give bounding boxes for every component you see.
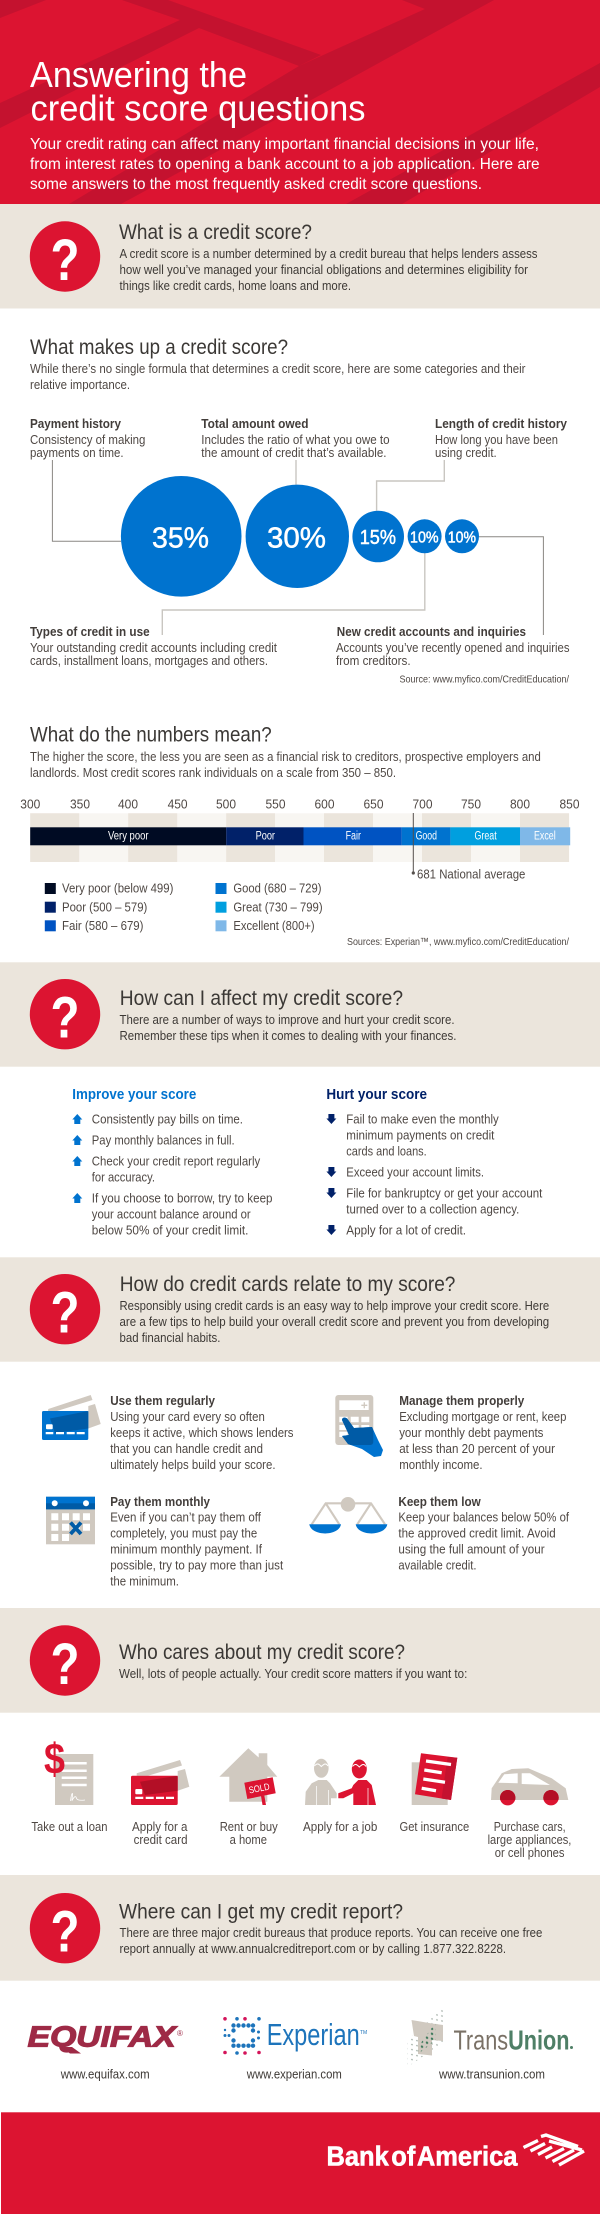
tip: use them regularly	[42, 1394, 294, 1472]
item: take out a loan	[31, 1735, 108, 1834]
body text	[120, 247, 538, 293]
panel: what makes up a credit score	[30, 336, 570, 686]
tip text	[110, 1394, 294, 1472]
heading: improve: Improve your score	[72, 1087, 196, 1103]
axis labels: 800	[510, 797, 530, 812]
icon: question mark: ?	[50, 1632, 80, 1697]
axis labels	[20, 797, 580, 812]
tip text: Use them regularly	[110, 1394, 215, 1408]
label: new credit accounts and inquiries: from creditors.	[336, 654, 411, 668]
heading: What makes up a credit score?	[30, 336, 288, 359]
tip text: available credit.	[398, 1559, 476, 1573]
hurt list: cards and loans.	[346, 1144, 427, 1158]
intro text: some answers to the most frequently asked credit score questions.	[30, 176, 482, 193]
label: a home	[230, 1833, 267, 1847]
panel: where can I get my credit report	[0, 1875, 600, 1981]
tip text: the approved credit limit. Avoid	[398, 1527, 556, 1541]
tip text: Manage them properly	[399, 1394, 524, 1408]
axis labels: 350	[70, 797, 90, 812]
body text: Remember these tips when it comes to dealing with your finances.	[120, 1029, 456, 1043]
body text: how well you’ve managed your financial obligations and determines eligibility for	[120, 263, 528, 277]
icon: car	[491, 1768, 568, 1805]
tip: keep them low	[309, 1495, 569, 1573]
axis labels: 450	[168, 797, 188, 812]
label: Get insurance	[400, 1820, 469, 1834]
item: get insurance	[400, 1753, 469, 1834]
bubble chart: 30%	[267, 522, 326, 554]
body text: things like credit cards, home loans and more.	[120, 279, 351, 293]
body text	[120, 1926, 542, 1956]
footer banner	[1, 2112, 600, 2214]
label: credit card	[134, 1833, 188, 1847]
label: length of credit history	[435, 417, 567, 460]
legend: Very poor (below 499)	[62, 882, 173, 896]
intro text: from interest rates to opening a bank account to a job application. Here are	[30, 156, 540, 173]
intro text: The higher the score, the less you are seen as a financial risk to creditors, prospective employers and	[30, 750, 541, 764]
logo: Experian: TM	[360, 2030, 367, 2036]
title	[30, 54, 366, 129]
axis labels: 750	[461, 797, 481, 812]
bubble chart: 10%	[410, 529, 439, 546]
legend: Excellent (800+)	[233, 919, 315, 933]
body text: report annually at www.annualcreditreport.com or by calling 1.877.322.8228.	[120, 1942, 506, 1956]
source note: Source: www.myfico.com/CreditEducation/	[400, 674, 569, 686]
heading: How do credit cards relate to my score?	[120, 1273, 455, 1296]
icon: handshake	[305, 1759, 376, 1805]
label: total amount owed	[201, 417, 390, 460]
tip text	[399, 1394, 566, 1472]
panel: what is a credit score	[0, 204, 600, 308]
score scale bar: Very poor	[108, 831, 149, 843]
panel: improve your score	[72, 1087, 273, 1237]
intro text	[30, 750, 541, 780]
legend: Great (730 – 799)	[233, 901, 323, 915]
national average marker	[412, 813, 525, 882]
icon: dotted cross	[408, 2007, 444, 2067]
icon: question mark	[30, 1893, 100, 1965]
Bank of America wordmark: Bank of America	[326, 2141, 518, 2172]
icon: credit card	[42, 1395, 101, 1440]
hurt list: turned over to a collection agency.	[346, 1202, 519, 1216]
tip text: Keep your balances below 50% of	[398, 1511, 569, 1525]
bubble chart: 35%	[152, 522, 209, 554]
label: length of credit history: using credit.	[435, 446, 497, 460]
heading: What do the numbers mean?	[30, 724, 272, 747]
intro text	[30, 136, 540, 193]
intro text: relative importance.	[30, 378, 130, 392]
tip text: Excluding mortgage or rent, keep	[399, 1410, 566, 1424]
body text: Responsibly using credit cards is an easy way to help improve your credit score. Here	[120, 1299, 549, 1313]
label: Take out a loan	[31, 1820, 108, 1834]
icon: question mark: ?	[50, 1900, 80, 1965]
hurt list	[346, 1112, 543, 1237]
header banner	[0, 0, 600, 204]
label: Apply for a job	[303, 1820, 377, 1834]
tip: manage them properly	[335, 1394, 566, 1472]
item: rent or buy a home	[219, 1748, 278, 1847]
icon: balance scale	[309, 1497, 387, 1533]
panel: how do credit cards relate	[0, 1257, 600, 1362]
bubble chart: 15%	[360, 527, 396, 549]
icon: question mark	[30, 1625, 100, 1697]
intro text: landlords. Most credit scores rank individuals on a scale from 350 – 850.	[30, 766, 396, 780]
legend: Fair (580 – 679)	[62, 919, 144, 933]
score scale bar: Excel	[534, 831, 556, 843]
tip text: using the full amount of your	[398, 1543, 545, 1557]
intro text: While there’s no single formula that determines a credit score, here are some categories and their	[30, 362, 526, 376]
logo: Experian: Experian	[267, 2017, 360, 2052]
label: large appliances,	[488, 1833, 571, 1847]
legend: Poor (500 – 579)	[62, 901, 147, 915]
axis labels: 700	[412, 797, 432, 812]
label: types of credit in use: Types of credit in use	[30, 625, 150, 639]
improve list: If you choose to borrow, try to keep	[92, 1191, 273, 1205]
body text: bad financial habits.	[120, 1331, 220, 1345]
improve list: your account balance around or	[92, 1207, 251, 1221]
improve list: Check your credit report regularly	[92, 1154, 261, 1168]
score scale bar	[30, 813, 570, 862]
logo: TransUnion	[408, 2007, 573, 2081]
body text	[120, 1299, 549, 1345]
label: payment history	[30, 417, 145, 460]
tip text: possible, try to pay more than just	[110, 1559, 284, 1573]
panel: hurt your score	[326, 1087, 543, 1237]
label: length of credit history: Length of credit history	[435, 417, 567, 431]
title: credit score questions	[30, 88, 366, 129]
label: total amount owed: Includes the ratio of what you owe to	[201, 433, 390, 447]
title: Answering the	[30, 54, 247, 95]
axis labels: 400	[118, 797, 138, 812]
item: apply for a credit card	[131, 1760, 189, 1847]
bubble chart: 10%	[448, 529, 476, 546]
icon: question mark: ?	[50, 228, 80, 293]
logo: Experian	[223, 2017, 367, 2081]
icon: question mark	[30, 221, 100, 293]
tip text	[398, 1495, 569, 1573]
label: new credit accounts and inquiries: Accounts you’ve recently opened and inquiries	[336, 641, 570, 655]
label: new credit accounts and inquiries: New credit accounts and inquiries	[337, 625, 526, 639]
hurt list: Exceed your account limits.	[346, 1165, 484, 1179]
label: types of credit in use	[30, 625, 277, 668]
tip text: Using your card every so often	[110, 1410, 265, 1424]
label: Apply for a	[132, 1820, 188, 1834]
improve list: Consistently pay bills on time.	[92, 1112, 243, 1126]
icon: red credit card	[131, 1760, 189, 1805]
label: Rent or buy	[220, 1820, 278, 1834]
up arrow icons	[72, 1114, 82, 1203]
connector lines	[52, 460, 543, 635]
heading: hurt: Hurt your score	[326, 1087, 427, 1103]
label	[488, 1820, 571, 1860]
body text	[120, 1013, 456, 1043]
axis labels: 600	[314, 797, 334, 812]
label: types of credit in use: Your outstanding credit accounts including credit	[30, 641, 277, 655]
improve list: Pay monthly balances in full.	[92, 1133, 235, 1147]
hurt list: minimum payments on credit	[346, 1128, 495, 1142]
url: www.experian.com	[246, 2067, 342, 2081]
label: payment history: Consistency of making	[30, 433, 145, 447]
label	[220, 1820, 278, 1847]
intro text: Your credit rating can affect many important financial decisions in your life,	[30, 136, 539, 153]
label: or cell phones	[495, 1846, 564, 1860]
score scale bar: Fair	[346, 831, 361, 843]
hurt list: Fail to make even the monthly	[346, 1112, 499, 1126]
down arrow icons	[326, 1114, 336, 1235]
logo: flag	[524, 2135, 584, 2165]
icon: dot matrix	[223, 2017, 261, 2055]
tip text: ultimately helps build your score.	[110, 1458, 276, 1472]
icon: calendar	[46, 1497, 95, 1544]
label	[132, 1820, 188, 1847]
hurt list: Apply for a lot of credit.	[346, 1223, 466, 1237]
logo: Equifax: ®	[177, 2029, 183, 2038]
icon: house with sold sign: SOLD	[248, 1782, 271, 1796]
label: total amount owed: Total amount owed	[201, 417, 308, 431]
logo: Equifax	[28, 2022, 183, 2081]
panel: who cares about my credit score	[0, 1608, 600, 1713]
icon: calculator and hand	[335, 1395, 383, 1457]
national average marker: 681 National average	[417, 866, 525, 882]
logo: Equifax: EQUIFAX	[28, 2022, 178, 2054]
score scale bar: Poor	[256, 831, 275, 843]
improve list: below 50% of your credit limit.	[92, 1223, 248, 1237]
icon: loan document: $	[44, 1735, 65, 1784]
url: www.equifax.com	[60, 2067, 150, 2081]
item: apply for a job	[303, 1759, 377, 1834]
body text: A credit score is a number determined by a credit bureau that helps lenders assess	[120, 247, 538, 261]
label: payment history: Payment history	[30, 417, 121, 431]
improve list	[92, 1112, 273, 1237]
axis labels: 300	[20, 797, 40, 812]
axis labels: 500	[216, 797, 236, 812]
tip text: that you can handle credit and	[110, 1442, 263, 1456]
panel: what do the numbers mean	[20, 724, 580, 948]
tip text: minimum monthly payment. If	[110, 1543, 262, 1557]
label: types of credit in use: cards, installment loans, mortgages and others.	[30, 654, 268, 668]
tip text: your monthly debt payments	[399, 1426, 543, 1440]
axis labels: 850	[560, 797, 580, 812]
icon: insurance policy	[412, 1753, 457, 1805]
label: length of credit history: How long you have been	[435, 433, 558, 447]
tip text: the minimum.	[110, 1575, 179, 1589]
intro text	[30, 362, 526, 392]
heading: What is a credit score?	[119, 221, 312, 244]
body text: are a few tips to help build your overall credit score and prevent you from developing	[120, 1315, 549, 1329]
tip text: Pay them monthly	[110, 1495, 210, 1509]
legend	[45, 882, 323, 933]
url: www.transunion.com	[438, 2067, 545, 2081]
icon: question mark	[30, 979, 100, 1051]
label: new credit accounts and inquiries	[336, 625, 570, 668]
heading: Who cares about my credit score?	[119, 1641, 405, 1664]
score scale bar: Good	[416, 831, 437, 843]
axis labels: 550	[266, 797, 286, 812]
tip text: monthly income.	[399, 1458, 483, 1472]
label: Purchase cars,	[494, 1820, 566, 1834]
tip text	[110, 1495, 284, 1589]
item: purchase cars, appliances or phones	[488, 1768, 571, 1860]
heading: How can I affect my credit score?	[120, 987, 403, 1010]
tip: pay them monthly	[46, 1495, 284, 1589]
tip text: Keep them low	[398, 1495, 481, 1509]
body text: There are a number of ways to improve and hurt your credit score.	[120, 1013, 454, 1027]
body text: There are three major credit bureaus that produce reports. You can receive one free	[120, 1926, 542, 1940]
panel: how can I affect my credit score	[0, 962, 600, 1067]
icon: question mark: ?	[50, 986, 80, 1051]
axis labels: 650	[364, 797, 384, 812]
bubble chart	[121, 476, 479, 597]
label: total amount owed: the amount of credit that’s available.	[201, 446, 386, 460]
body text: Well, lots of people actually. Your credit score matters if you want to:	[119, 1667, 467, 1681]
icon: question mark: ?	[50, 1281, 80, 1346]
improve list: for accuracy.	[92, 1170, 155, 1184]
tip text: Even if you can’t pay them off	[110, 1511, 261, 1525]
legend: Good (680 – 729)	[233, 882, 322, 896]
logo: TransUnion: TransUnion	[454, 2024, 570, 2055]
tip text: completely, you must pay the	[110, 1527, 257, 1541]
hurt list: File for bankruptcy or get your account	[346, 1186, 543, 1200]
score scale bar: Great	[474, 831, 497, 843]
label: payment history: payments on time.	[30, 446, 124, 460]
tip text: at less than 20 percent of your	[399, 1442, 555, 1456]
tip text: keeps it active, which shows lenders	[110, 1426, 294, 1440]
heading: Where can I get my credit report?	[119, 1900, 403, 1923]
icon: question mark	[30, 1274, 100, 1346]
